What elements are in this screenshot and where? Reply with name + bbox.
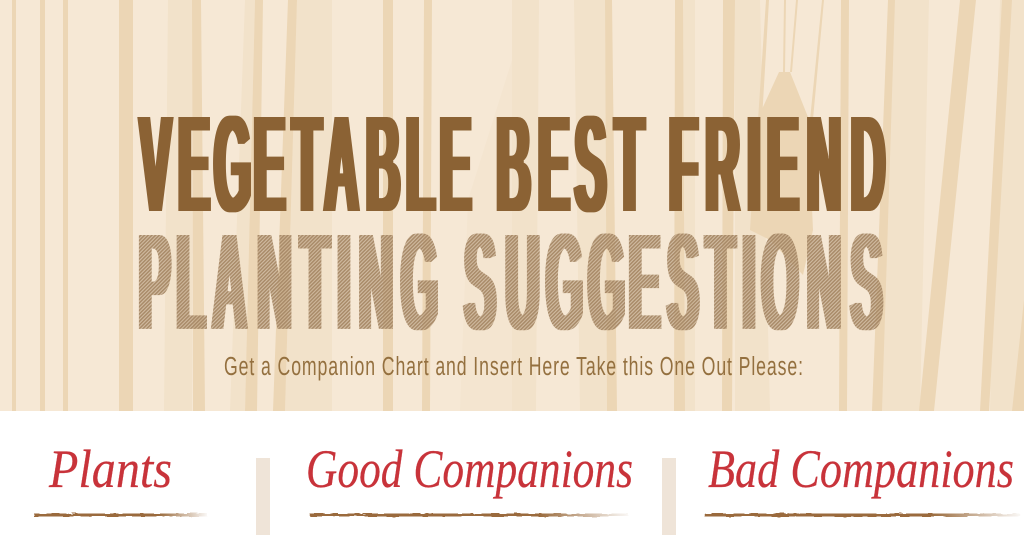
- subtitle: Get a Companion Chart and Insert Here Take this One Out Please:: [224, 352, 803, 381]
- underline: Bad Companions: [705, 514, 1020, 516]
- title line 2: PLANTING SUGGESTIONS: [139, 205, 882, 361]
- column heading: Good Companions: [306, 439, 633, 516]
- faint wood wedge: [460, 60, 512, 411]
- underline: Good Companions: [310, 514, 628, 516]
- column heading: Plants: Plants: [48, 439, 172, 499]
- wood background panel: [0, 0, 1024, 411]
- underline: Plants: [34, 514, 207, 516]
- column heading: Good Companions: Good Companions: [306, 439, 633, 499]
- divider 2: [662, 458, 676, 535]
- title line 1: VEGETABLE BEST FRIEND: [140, 87, 885, 243]
- divider 1: [256, 458, 270, 535]
- column heading: Plants: [34, 439, 207, 516]
